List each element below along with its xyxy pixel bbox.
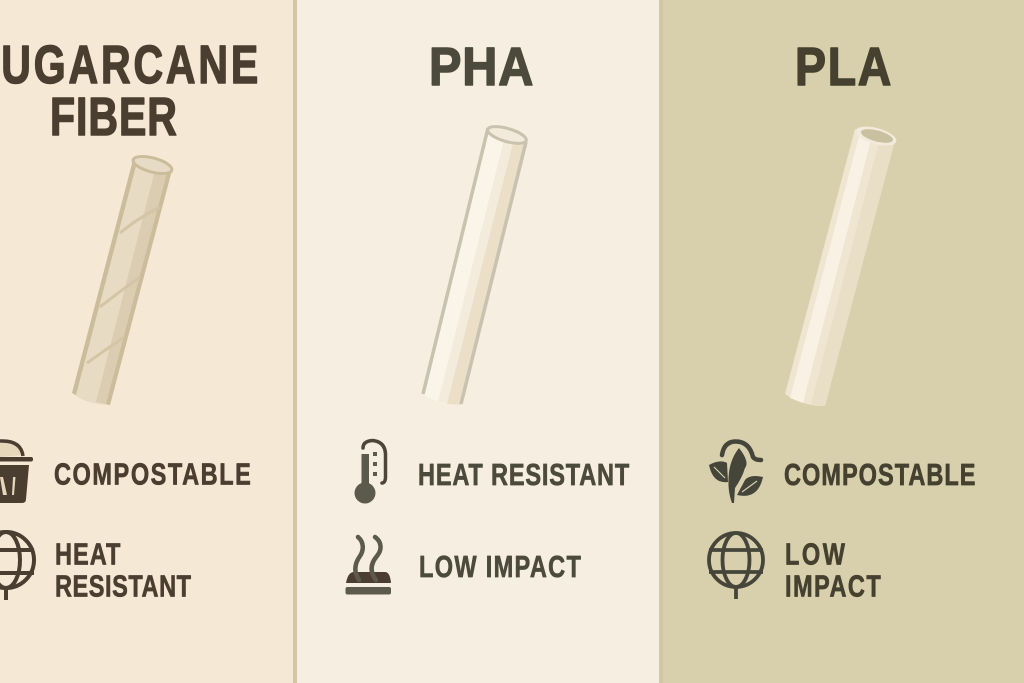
heading: PHA: PHA	[429, 36, 533, 97]
heading: PLA: PLA	[795, 36, 891, 97]
label: low impact: LOW	[785, 536, 845, 571]
label: low impact: LOW IMPACT	[419, 549, 581, 584]
panel: PHA	[297, 0, 660, 683]
label: low impact	[785, 536, 881, 603]
label: heat resistant: RESISTANT	[55, 568, 191, 603]
label: heat resistant	[55, 536, 191, 603]
icon: globe	[0, 532, 34, 600]
icon: globe	[709, 533, 763, 599]
label: heat resistant: HEAT	[55, 536, 121, 571]
heading: sugarcane fiber	[0, 36, 258, 147]
divider: left	[293, 0, 297, 683]
divider: right	[659, 0, 663, 683]
panel: PLA	[663, 0, 1024, 683]
label: heat resistant: HEAT RESISTANT	[418, 457, 629, 492]
panel: sugarcane fiber	[0, 0, 294, 683]
icon: compost bin	[0, 441, 33, 503]
straw: PHA	[423, 123, 528, 405]
straw: PLA	[785, 123, 898, 406]
icon: thermometer	[354, 440, 386, 504]
label: compostable: COMPOSTABLE	[784, 457, 976, 492]
icon: leaves with arrow	[709, 441, 763, 503]
label: low impact: IMPACT	[785, 568, 881, 603]
heading: sugarcane fiber: FIBER	[50, 88, 177, 147]
icon: steam on heat pad	[346, 537, 391, 594]
label: compostable: COMPOSTABLE	[54, 456, 251, 491]
straw: sugarcane fiber	[72, 153, 174, 405]
